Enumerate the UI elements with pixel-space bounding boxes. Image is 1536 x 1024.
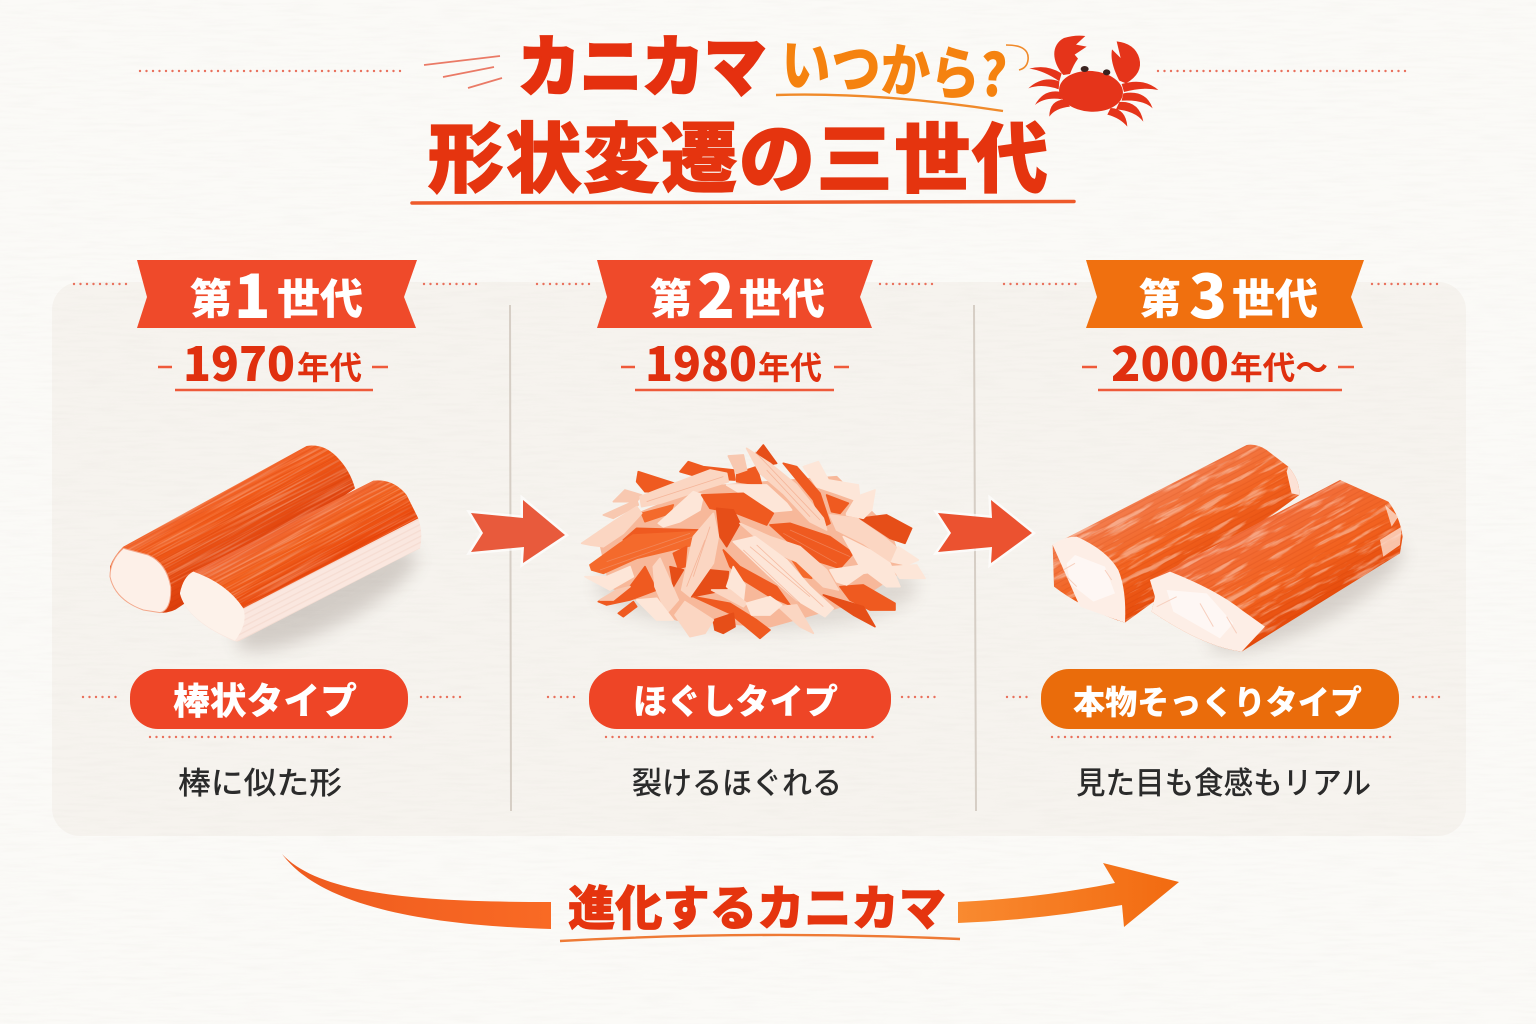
title — [140, 14, 1410, 208]
label pill: shredded type — [548, 669, 938, 737]
era: 1970s: 年代 — [297, 343, 362, 389]
era: 1980s: 年代 — [758, 343, 822, 389]
header dots — [1004, 283, 1440, 285]
label pill: shredded type: ほぐしタイプ — [633, 674, 838, 725]
label pill: stick type — [83, 669, 464, 737]
label pill: stick type: 棒状タイプ — [173, 671, 357, 725]
ribbon: generation 3: 第 — [1139, 266, 1181, 327]
header dots — [74, 283, 478, 285]
ribbon: generation 3: 3 — [1189, 249, 1227, 336]
swoosh left — [282, 854, 551, 929]
front stick — [180, 480, 422, 642]
evolution banner — [282, 854, 1179, 941]
panel: generations — [52, 282, 1466, 836]
ribbon: generation 1: 第 — [190, 266, 232, 327]
small swirl — [1006, 45, 1028, 70]
banner underline — [560, 935, 960, 941]
illustration: realistic crab — [1052, 444, 1406, 658]
front stick — [1150, 480, 1403, 652]
era: 2000s: 年代～ — [1230, 343, 1328, 389]
ribbon: generation 1 — [137, 249, 417, 336]
title dotted line left — [140, 70, 403, 72]
divider 1 — [510, 305, 511, 811]
ribbon: generation 3 — [1086, 249, 1364, 336]
generation 3 column — [1002, 260, 1440, 797]
generation 1 column — [0, 249, 505, 803]
era: 2000s — [1082, 326, 1354, 395]
title: main heading: 形状変遷の三世代 — [428, 98, 1048, 208]
label pill: realistic type — [1007, 669, 1440, 737]
title underline — [412, 202, 1074, 203]
ribbon: generation 2: 世代 — [739, 266, 825, 327]
era: 1980s — [621, 326, 849, 395]
ribbon: generation 3: 世代 — [1232, 266, 1318, 327]
divider 2 — [974, 305, 976, 811]
era: 1980s: 1980 — [645, 326, 757, 395]
label pill: realistic type: 本物そっくりタイプ — [1073, 676, 1362, 724]
illustration: shredded crab — [582, 445, 925, 638]
description: 裂けるほぐれる — [632, 758, 842, 803]
back stick — [110, 446, 355, 614]
arrow 2 — [938, 500, 1032, 563]
flake fibre lines — [600, 452, 850, 607]
icon: crab — [1028, 36, 1158, 127]
ribbon: generation 2: 2 — [697, 249, 735, 336]
accent curve — [776, 95, 1003, 111]
speed lines — [424, 56, 502, 88]
generation 2 column — [537, 249, 938, 803]
description: 見た目も食感もリアル — [1076, 758, 1371, 803]
title: itsukara: いつから? — [779, 18, 1009, 114]
era: 2000s: 2000 — [1111, 326, 1229, 395]
banner text: 進化するカニカマ — [568, 869, 946, 939]
title dotted line right — [1158, 70, 1410, 72]
ribbon: generation 1: 世代 — [277, 266, 363, 327]
arrow 1 — [471, 500, 565, 563]
era: 1970s — [158, 326, 388, 395]
title: kanikama: カニカマ — [518, 14, 766, 110]
description: 棒に似た形 — [178, 758, 342, 803]
swoosh arrow right — [958, 863, 1179, 927]
illustration: stick crab — [110, 446, 422, 658]
ribbon: generation 2 — [597, 249, 873, 336]
header dots — [537, 283, 935, 285]
ribbon: generation 1: 1 — [234, 249, 271, 336]
ribbon: generation 2: 第 — [650, 266, 692, 327]
back stick — [1052, 444, 1300, 623]
era: 1970s: 1970 — [183, 326, 295, 395]
